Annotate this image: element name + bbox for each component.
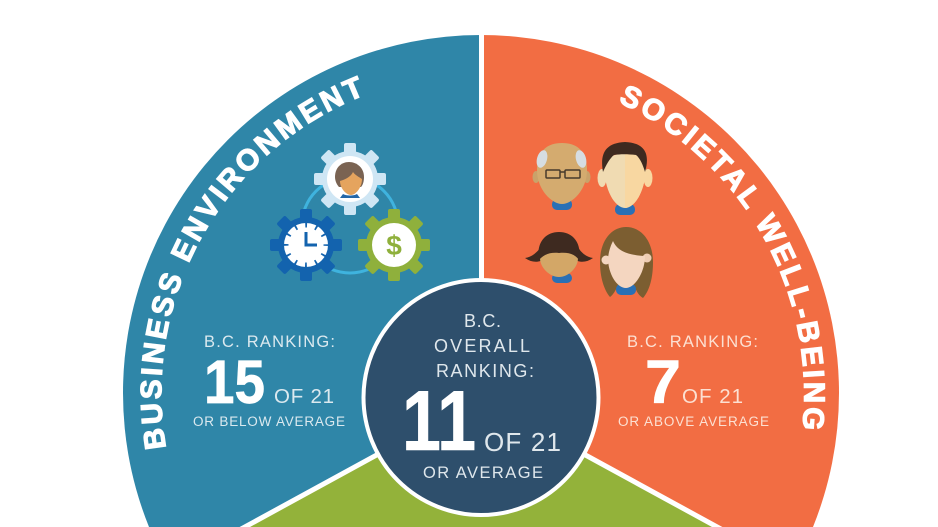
text block: societal well-being ranking: B.C. RANKING: xyxy=(627,333,758,351)
text: overall label xyxy=(434,311,534,381)
text block: business environment ranking: B.C. RANKING: xyxy=(204,333,335,351)
text: overall label: OVERALL xyxy=(434,336,530,356)
panel: business environment sector xyxy=(100,30,481,527)
icon: grandfather xyxy=(532,143,590,210)
icon: person gear xyxy=(314,143,386,215)
panel: overall ranking circle xyxy=(364,280,598,515)
text block: societal well-being ranking: OR ABOVE AVERAGE xyxy=(618,414,769,429)
icon: clock gear xyxy=(270,209,342,281)
icon: dollar gear: $ xyxy=(386,230,402,261)
text block: societal well-being ranking xyxy=(618,333,769,429)
text block: business environment ranking: OF 21 xyxy=(274,385,334,408)
text: overall label: RANKING: xyxy=(436,361,534,381)
heading: business environment: BUSINESS ENVIRONMENT xyxy=(140,75,360,450)
heading: societal well-being: SOCIETAL WELL-BEING xyxy=(620,86,826,429)
icon: woman xyxy=(600,227,653,298)
text block: societal well-being ranking: OF 21 xyxy=(682,385,743,408)
icon: connected gears xyxy=(270,143,430,281)
text block: business environment ranking: 15 xyxy=(204,348,265,416)
icon: dollar gear xyxy=(358,209,430,281)
text: of 21: OF 21 xyxy=(484,427,561,457)
icon: four faces xyxy=(525,142,653,298)
text: overall label: B.C. xyxy=(464,311,501,331)
divider between sectors xyxy=(479,30,484,285)
text: average note: OR AVERAGE xyxy=(423,464,543,482)
connecting ring xyxy=(302,177,398,273)
text: overall number: 11 xyxy=(402,374,476,469)
icon: girl xyxy=(525,232,593,283)
text block: societal well-being ranking: 7 xyxy=(645,348,681,416)
icon: man xyxy=(598,142,652,215)
panel: societal well-being sector xyxy=(481,30,862,527)
text block: business environment ranking: OR BELOW AVERAGE xyxy=(193,414,345,429)
text block: business environment ranking xyxy=(193,333,345,429)
panel: green lower sector xyxy=(240,453,722,527)
